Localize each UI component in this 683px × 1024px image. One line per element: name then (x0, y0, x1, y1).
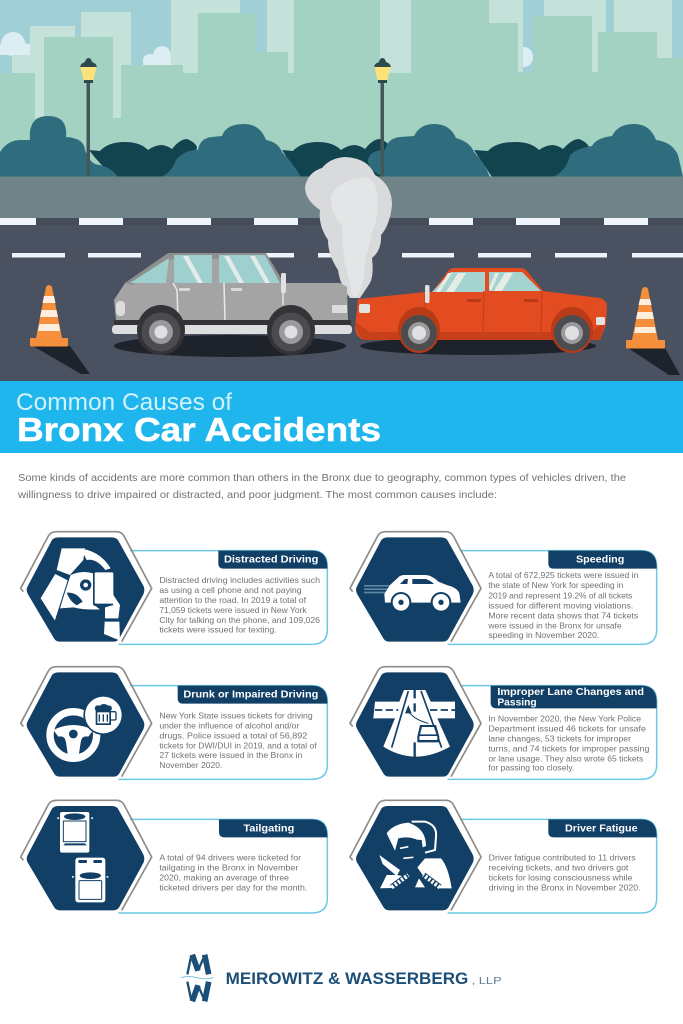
panel: drunk or impaired driving: November 2020. (159, 760, 222, 770)
scene: sidewalk (0, 176, 683, 218)
panel: distracted driving: attention to the road. In 2019 a total of (159, 595, 307, 605)
illustration: gray car (112, 253, 352, 357)
mid buildings (0, 0, 683, 178)
icon: smoke plume (305, 157, 392, 298)
panel: drunk or impaired driving: under the influence of alcohol and/or (159, 721, 299, 731)
title line 1: Common Causes of (16, 389, 232, 416)
heading tab (548, 551, 657, 569)
title banner (0, 381, 683, 453)
panel: speeding: 2019 and represent 19.2% of all tickets (488, 590, 633, 600)
panel: distracted driving (21, 532, 327, 644)
panel: improper lane changes and passing (350, 667, 657, 779)
light buildings (12, 0, 672, 121)
panel: speeding: speeding in November 2020. (488, 630, 599, 640)
panel: drunk or impaired driving (21, 667, 327, 779)
body text: A total of 672,925 tickets were issued in (488, 570, 639, 580)
icon: road junction with car (373, 690, 455, 761)
panel: tailgating (21, 800, 327, 913)
panel: speeding: were issued in the Bronx for unsafe (487, 620, 622, 630)
panel: driver fatigue: Driver Fatigue (565, 824, 638, 835)
panel: speeding (350, 532, 657, 644)
panel: distracted driving: City for talking on the phone, and 109,026 (159, 615, 320, 625)
panel: tailgating: Tailgating (243, 824, 294, 835)
illustration: red car (355, 268, 607, 355)
panel: driver fatigue (350, 800, 657, 913)
body text: New York State issues tickets for driving (159, 711, 313, 721)
panel: speeding: issued for different moving violations. (488, 600, 633, 610)
panel: drunk or impaired driving: Drunk or Impaired Driving (183, 690, 318, 701)
heading tab (548, 819, 657, 837)
logo wordmark: MEIROWITZ & WASSERBERG (226, 969, 468, 988)
heading tab (218, 551, 327, 569)
icon: traffic cone right (626, 287, 680, 375)
scene: teal bushes (0, 116, 683, 177)
panel: tailgating: tailgating in the Bronx in November (159, 862, 298, 872)
clouds (0, 32, 533, 67)
panel: improper lane changes and passing: Passing (497, 698, 537, 709)
body text: In November 2020, the New York Police (488, 713, 641, 723)
logo: Meirowitz & Wasserberg: , LLP (472, 976, 502, 987)
panel: distracted driving: 71,059 tickets were issued in New York (159, 605, 307, 615)
panel: tailgating: ticketed drivers per day for the month. (159, 882, 307, 892)
heading tab (219, 819, 327, 837)
heading tab (491, 686, 657, 708)
body text: A total of 94 drivers were ticketed for (159, 853, 301, 863)
icon: traffic cone left (30, 285, 90, 374)
intro text: Some kinds of accidents are more common than others in the Bronx due to geography, common types of vehicles driven, the (18, 472, 626, 484)
panel: tailgating: 2020, making an average of three (159, 872, 289, 882)
panel: distracted driving: as using a cell phone and not paying (159, 585, 302, 595)
icon: street lamp right (374, 58, 391, 179)
panel: driver fatigue: tickets for losing consciousness while (489, 872, 633, 882)
scene: dark bushes (89, 139, 589, 177)
panel: drunk or impaired driving: drugs. Police issued a total of 56,892 (159, 730, 308, 740)
panel: speeding: the state of New York for speeding in (488, 580, 624, 590)
icon: hand on wheel with phone (40, 548, 120, 641)
panel: speeding: Speeding (576, 555, 624, 566)
scene: road (0, 218, 683, 381)
panel: improper lane changes and passing: lane changes, 53 tickets for improper (488, 733, 631, 743)
logo mark (181, 955, 213, 1001)
panel: distracted driving: tickets were issued for texting. (159, 624, 277, 634)
panel: improper lane changes and passing: turns, and 74 tickets for improper passing (488, 743, 650, 753)
intro text (17, 472, 626, 501)
panel: improper lane changes and passing: for passing too closely. (488, 763, 574, 773)
icon: street lamp left (80, 58, 97, 194)
title line 2: Bronx Car Accidents (17, 411, 381, 448)
panel: drunk or impaired driving: 27 tickets were issued in the Bronx in (159, 750, 303, 760)
panel: drunk or impaired driving: tickets for DWI/DUI in 2019, and a total of (159, 740, 317, 750)
heading tab (178, 686, 327, 704)
icon: steering wheel and beer (50, 695, 123, 758)
scene: skyline background (0, 0, 683, 180)
panel: improper lane changes and passing: or lane usage. They also wrote 65 tickets (488, 753, 644, 763)
panel: improper lane changes and passing: Improper Lane Changes and (497, 687, 644, 698)
icon: two cars top view (57, 812, 108, 902)
logo: Meirowitz & Wasserberg (181, 955, 502, 1001)
panel: driver fatigue: receiving tickets, and two drivers got (489, 862, 629, 872)
panel: speeding: More recent data shows that 74 tickets (488, 610, 639, 620)
icon: speeding car (364, 575, 461, 613)
panel: distracted driving: Distracted Driving (224, 555, 318, 566)
body text: Driver fatigue contributed to 11 drivers (489, 853, 636, 863)
panel: improper lane changes and passing: Department issued 46 tickets for unsafe (488, 723, 646, 733)
icon: tired driver with seat belt (379, 822, 452, 888)
panel: driver fatigue: driving in the Bronx in November 2020. (489, 882, 641, 892)
intro text: willingness to drive impaired or distracted, and poor judgment. The most common causes include: (17, 489, 497, 501)
body text: Distracted driving includes activities such (159, 575, 320, 585)
